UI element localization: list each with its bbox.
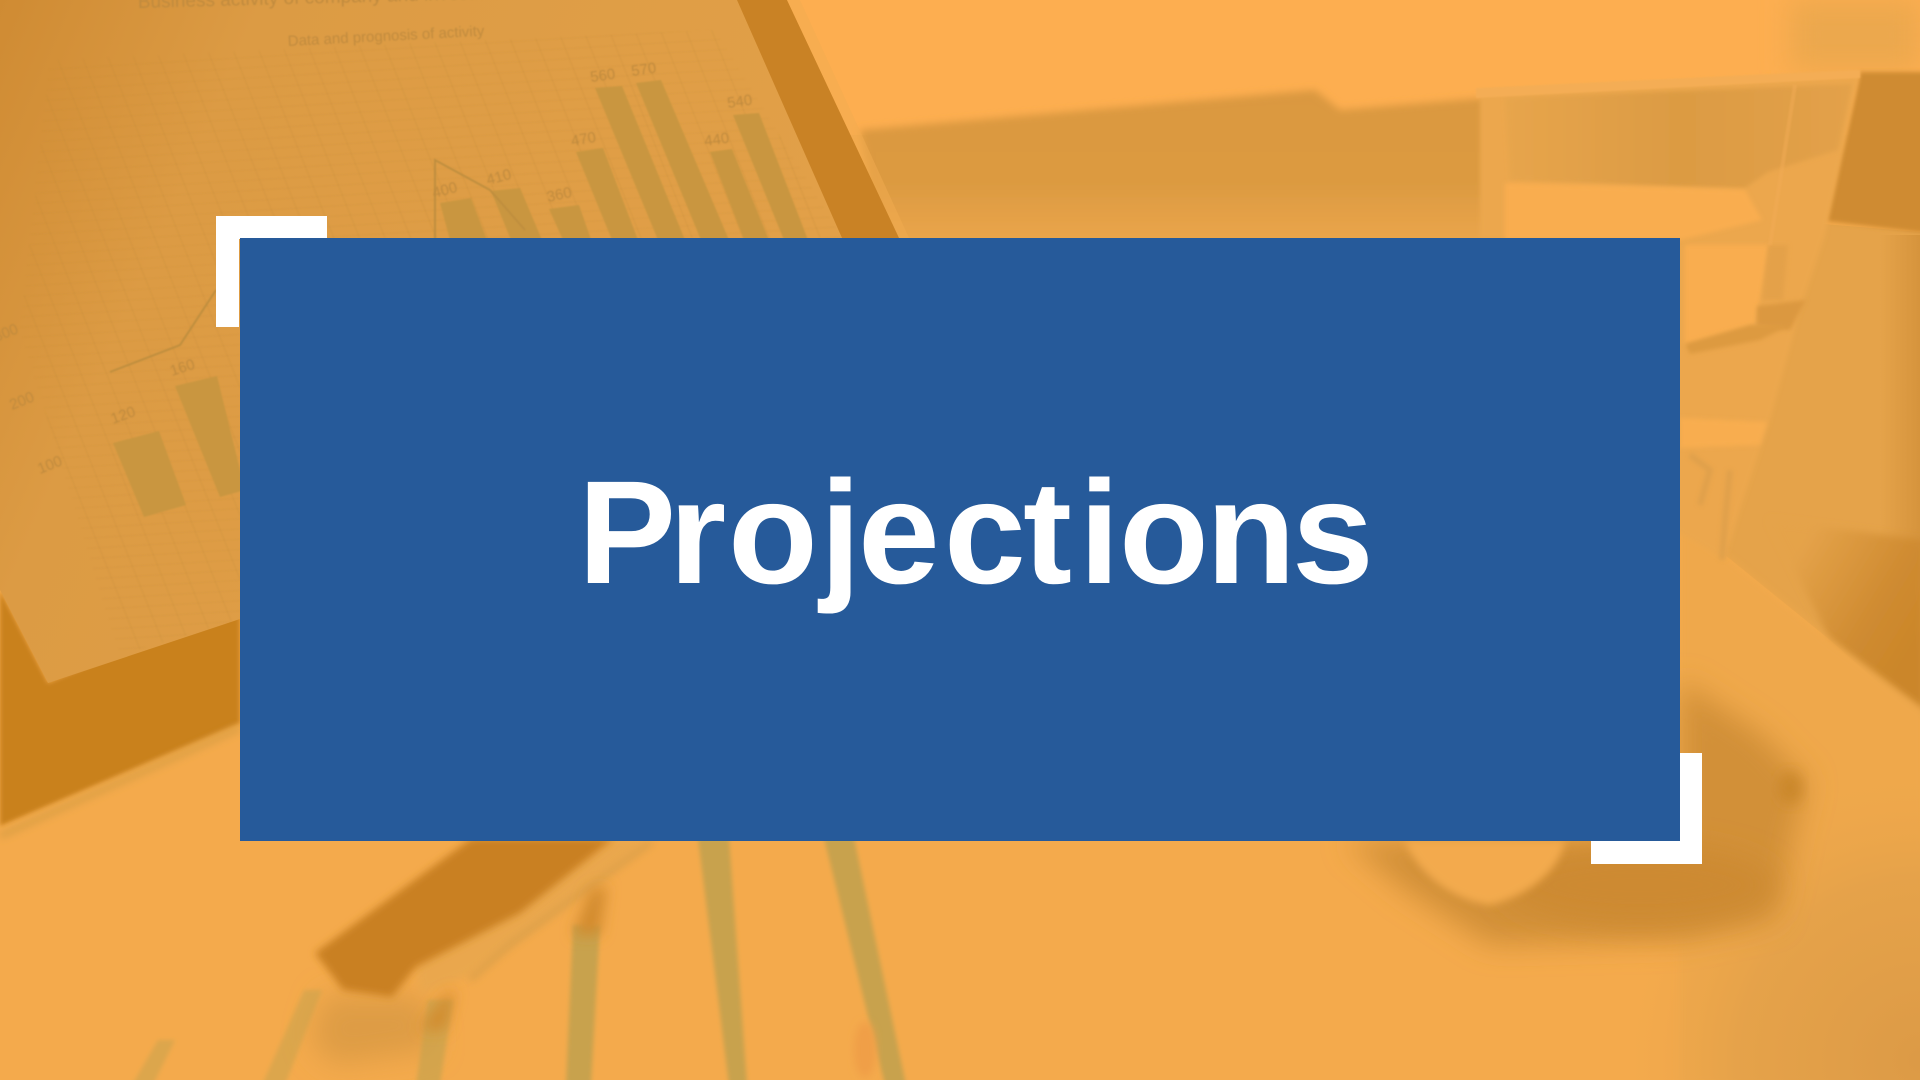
photo: pencil light edge (416, 840, 650, 995)
photo: diagonal light strip (1680, 520, 1920, 1080)
chart value labels: 540 (726, 92, 753, 112)
photo: pencil olive edge (470, 842, 652, 980)
chart value labels: 360 (545, 184, 573, 206)
photo: pencil shadow area (310, 995, 435, 1065)
photo: straws (132, 838, 906, 1080)
photo: right dark wall (1826, 72, 1920, 233)
photo: straw tips (420, 885, 607, 1030)
photo: right surface (1725, 222, 1920, 720)
chart bars (113, 80, 808, 517)
chart value labels: 120 (109, 403, 138, 428)
photo: top right wall (780, 0, 1920, 135)
title panel (240, 238, 1680, 841)
chart value labels: 470 (570, 129, 597, 150)
corner bracket: bottom right (1591, 753, 1702, 864)
photo: table band (860, 90, 1520, 245)
chart value labels: 400 (431, 179, 459, 202)
chart value labels: 200 (7, 389, 37, 414)
photo: laptop screen with chart (0, 0, 842, 683)
title: Projections (578, 451, 1374, 615)
chart value labels: 560 (589, 66, 616, 86)
chart value labels: 570 (630, 60, 657, 80)
chart value labels: 440 (703, 130, 730, 150)
chart value labels: 410 (485, 166, 513, 189)
photo: phone shadow (1345, 680, 1808, 945)
chart title text (138, 0, 517, 50)
photo: phone shadow core (1505, 845, 1775, 925)
photo: laptop frame (0, 0, 910, 836)
photo: bottom right shade (1600, 760, 1920, 1080)
chart value labels (0, 60, 753, 478)
chart value labels: 160 (168, 356, 197, 380)
photo: far right shade (1880, 235, 1920, 590)
photo: phone edge highlight (1778, 772, 1802, 804)
photo: reflection beneath panel (1405, 840, 1565, 905)
chart trend lines (110, 160, 525, 372)
chart title text: Data and prognosis of activity (287, 23, 485, 50)
photo: orange blur at bottom (854, 1022, 876, 1078)
chart value labels: 100 (35, 453, 65, 478)
photo: pencil (315, 838, 614, 997)
photo: lower right dark corner (1770, 520, 1920, 712)
photo: drinking glass (1476, 70, 1860, 560)
corner bracket: top left (216, 216, 327, 327)
